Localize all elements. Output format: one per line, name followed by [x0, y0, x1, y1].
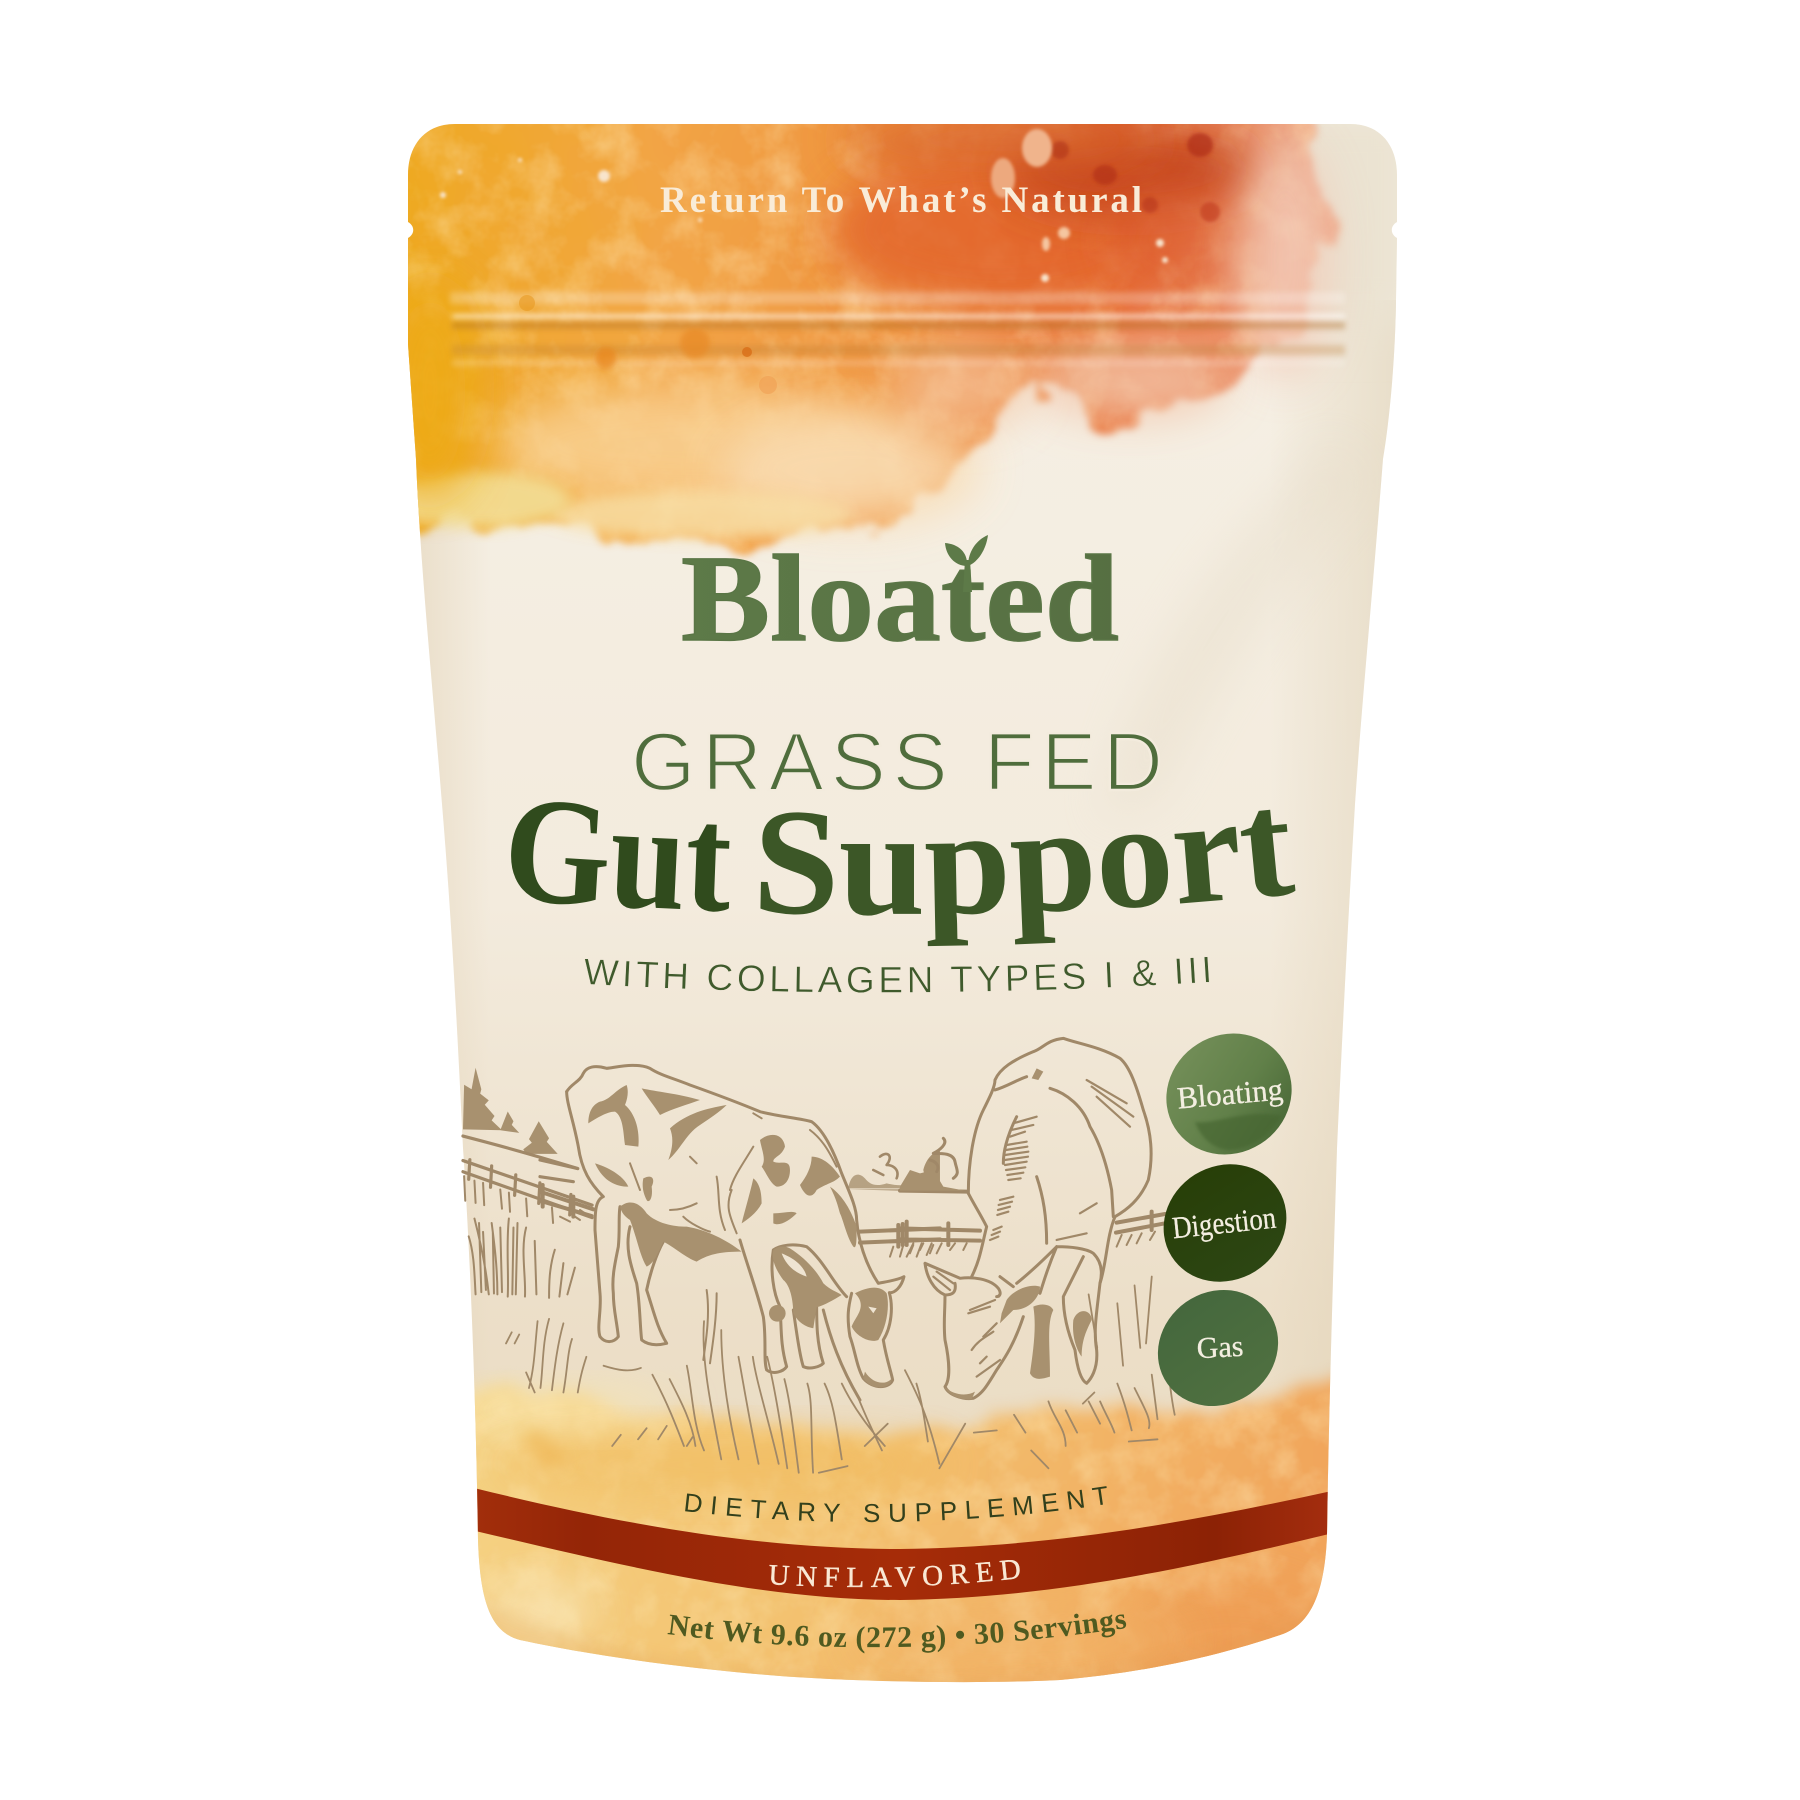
label: unflavored: UNFLAVORED [769, 1560, 1020, 1588]
badge: Digestion: Digestion [1171, 1200, 1278, 1245]
product pouch infographic [408, 124, 1397, 1682]
illustration: grazing cows pasture [463, 1038, 1180, 1473]
left cow [567, 1065, 904, 1400]
foreground grass [506, 1277, 1180, 1473]
right cow [900, 1038, 1165, 1400]
badge: Gas [1135, 1267, 1301, 1429]
background treeline and centre fence [540, 1150, 940, 1257]
badge: Digestion [1141, 1141, 1309, 1305]
background trees and fences [463, 1068, 592, 1298]
red curved band [477, 1488, 1328, 1600]
heading: GRASS FED: GRASS FED [631, 715, 1163, 808]
subtitle: with collagen types: WITH COLLAGEN TYPES I & III [584, 956, 1210, 993]
title: Gut Support: Gut [511, 802, 730, 912]
title: Gut Support [511, 802, 1296, 946]
icon: sprout leaf [945, 535, 988, 592]
zipper creases [450, 292, 1345, 394]
tagline: Return To What's Natural: Return To What’s Natural [660, 180, 1142, 221]
watercolor wash: bottom [474, 1368, 1330, 1682]
watercolor wash: top [380, 90, 1330, 545]
bottom edge shading [488, 1609, 614, 1656]
badge: Bloating [1143, 1010, 1315, 1178]
logo: Bloated: Bloated [681, 530, 1119, 667]
pouch body [380, 90, 1420, 1710]
net weight and servings: Net Wt 9.6 oz (272 g) • 30 Servings [668, 1614, 1126, 1654]
badge: Bloating: Bloating [1176, 1071, 1284, 1116]
label: dietary supplement: DIETARY SUPPLEMENT [685, 1486, 1107, 1522]
title: Gut Support: Support [760, 810, 1296, 946]
watercolor droplets [440, 129, 1168, 282]
badge: Gas: Gas [1196, 1330, 1244, 1365]
